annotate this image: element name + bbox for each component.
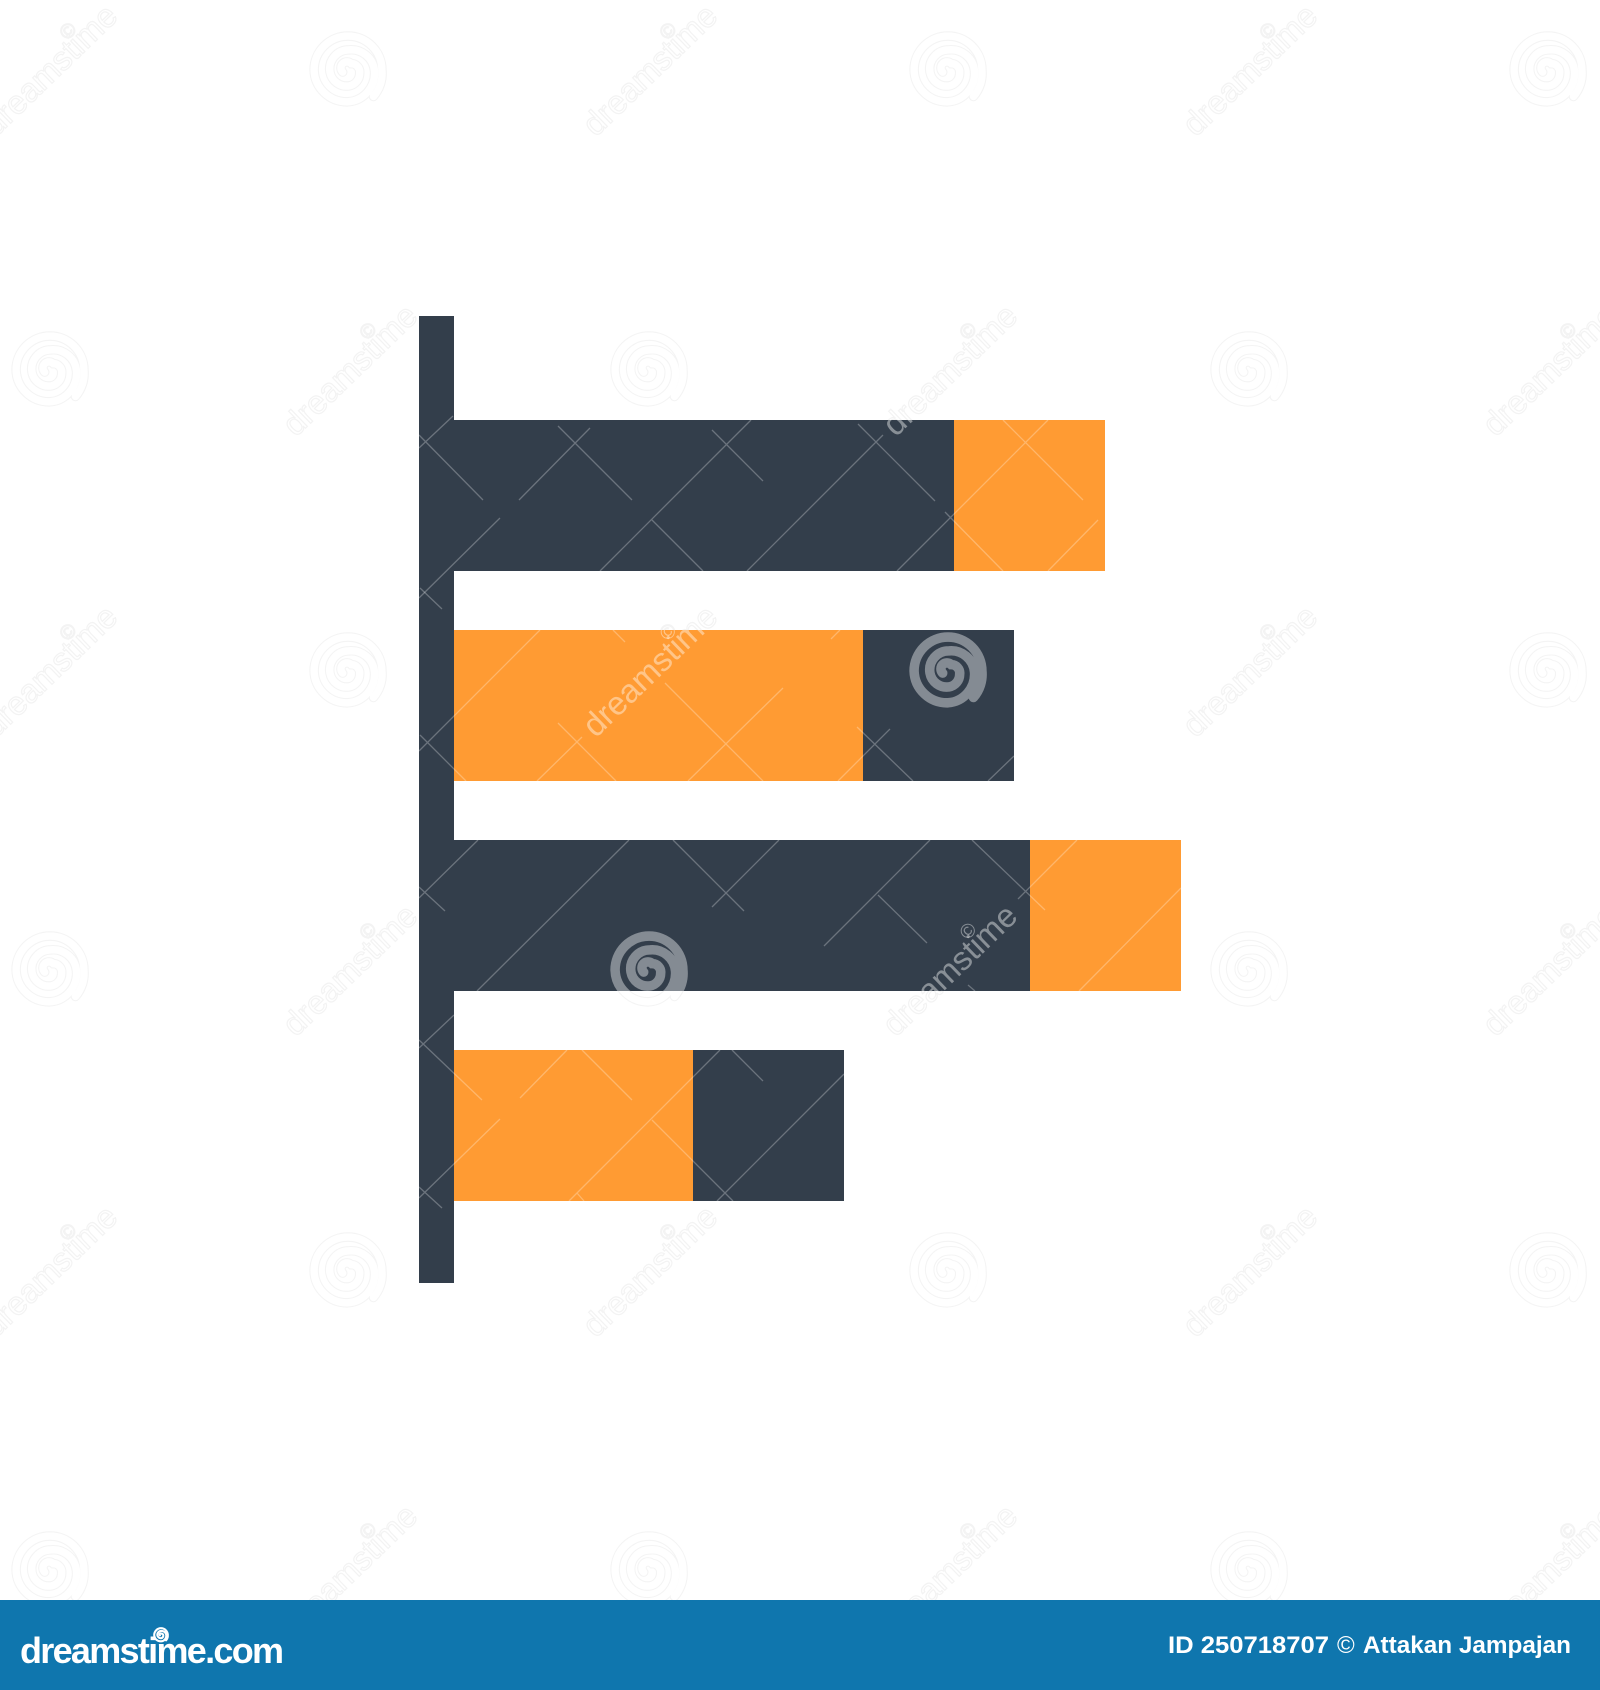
bar 2: orange segment [454,630,863,781]
banner background [0,1600,1600,1690]
vertical axis [419,316,454,1283]
bar 4: dark segment [693,1050,844,1201]
author credit: Attakan Jampajan [1363,1632,1571,1659]
bar 3: dark segment [454,840,1030,991]
bar 4: orange segment [454,1050,693,1201]
watermark text tip on bar 1 [887,420,913,434]
bar 3: orange segment [1030,840,1181,991]
bar chart [419,316,1181,1283]
watermark marks over bars [587,420,1016,991]
watermark text on bar 2 [587,630,705,736]
watermark crossing lines over bars [419,416,1181,1208]
spiral on bar 2 [914,637,982,703]
spiral on bar 3 [615,936,683,1002]
bar 2: dark segment [863,630,1014,781]
copyright symbol: © [1337,1632,1355,1659]
watermark text on bar 3 [922,909,1016,991]
image id: ID 250718707 [1168,1632,1329,1659]
logo spiral icon [154,1628,168,1641]
footer banner [0,1600,1600,1690]
logo wordmark: dreamstime.com [20,1630,284,1671]
bar 1: dark segment [454,420,954,571]
bar 1: orange segment [954,420,1105,571]
